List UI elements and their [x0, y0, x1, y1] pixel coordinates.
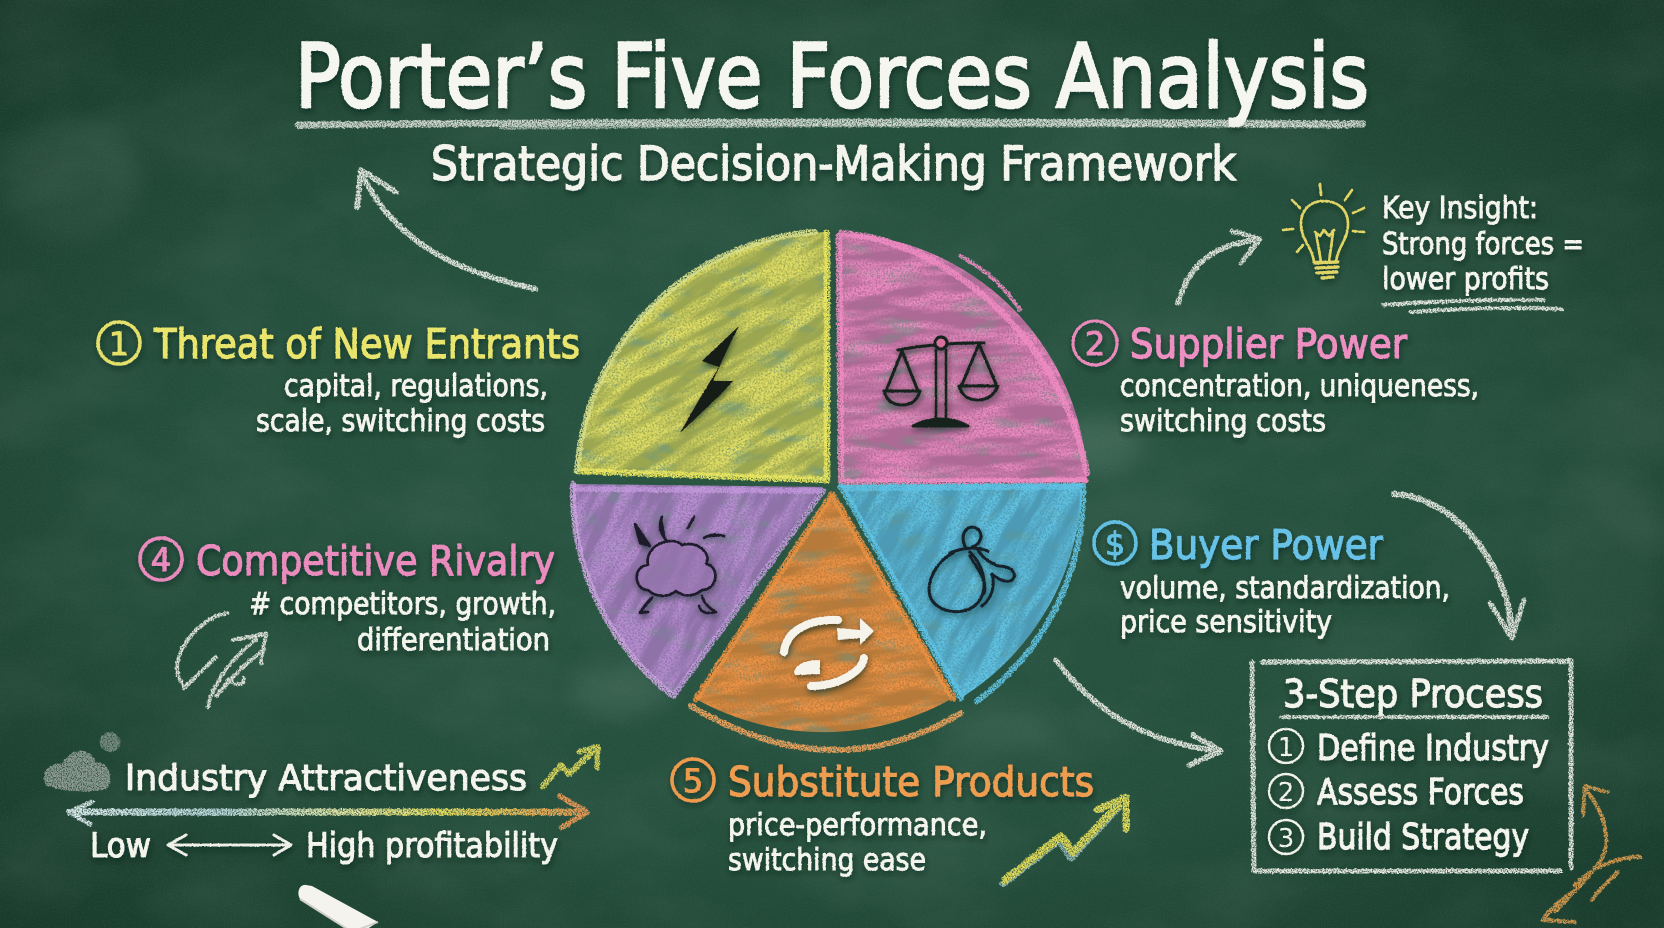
- number badge 1: [98, 322, 140, 364]
- callout: key insight: [1178, 184, 1584, 312]
- panel heading: 3-Step Process: [1283, 672, 1543, 716]
- box outline: [1252, 661, 1571, 871]
- arrow to bulb: [1178, 231, 1260, 303]
- arrow: curved up-left towards title: [357, 170, 536, 289]
- gradient arrow: [69, 796, 587, 828]
- heading: Threat of New Entrants: [153, 320, 580, 368]
- description: [1120, 571, 1450, 640]
- high profitability label: High profitability: [306, 826, 558, 866]
- label: substitute products: [672, 758, 1094, 878]
- icon: orange double arrow: [1543, 786, 1640, 922]
- arrow: pie to process box: [1056, 660, 1221, 765]
- description: [728, 808, 987, 878]
- subtitle: Strategic Decision-Making Framework: [431, 137, 1237, 192]
- number badge 5: 5: [683, 762, 703, 800]
- pie slice: competitive rivalry, purple: [569, 480, 826, 699]
- step 3: 3: [1278, 824, 1294, 854]
- icon: small yellow trend arrow: [543, 746, 598, 786]
- number badge 2: 2: [1085, 325, 1105, 363]
- description: capital, regulations,: [284, 369, 548, 404]
- panel: industry attractiveness scale: [44, 732, 598, 866]
- icon: cycle arrows: [784, 618, 874, 686]
- description: switching costs: [1120, 404, 1326, 439]
- icon: white rivalry arrows: [177, 613, 266, 708]
- label: threat of new entrants: [98, 320, 580, 439]
- panel: 3-step process: [1252, 661, 1571, 871]
- heading: Competitive Rivalry: [196, 537, 555, 585]
- description: [256, 369, 548, 439]
- icon: light bulb: [1283, 184, 1364, 278]
- scale heading: Industry Attractiveness: [125, 758, 527, 799]
- heading underline: [1281, 715, 1547, 719]
- chalk stick: [298, 885, 378, 928]
- pie slice: substitute products, orange: [688, 491, 964, 754]
- description: volume, standardization,: [1120, 571, 1450, 606]
- heading: Supplier Power: [1130, 320, 1407, 368]
- step 3: [1269, 817, 1529, 858]
- dollar badge: $: [1105, 525, 1125, 563]
- number badge 5: [672, 759, 714, 801]
- description: [1120, 369, 1479, 439]
- description: price-performance,: [728, 808, 987, 843]
- step 2: [1269, 772, 1524, 813]
- description: switching ease: [728, 843, 926, 878]
- double-headed arrow: [168, 835, 291, 855]
- number badge 4: 4: [151, 541, 171, 579]
- label: supplier power: [1073, 320, 1479, 439]
- insight text: Strong forces =: [1382, 227, 1584, 262]
- label: buyer power: [1094, 521, 1450, 640]
- description: concentration, uniqueness,: [1120, 369, 1479, 404]
- description: [249, 587, 556, 658]
- insight text: Key Insight:: [1382, 191, 1538, 226]
- title underline: [298, 122, 1363, 128]
- label: competitive rivalry: [140, 537, 556, 658]
- dollar badge: [1094, 522, 1136, 564]
- icon: conflict cloud: [635, 517, 724, 613]
- pie slice: threat of new entrants, yellow: [573, 228, 832, 484]
- step 1: Define Industry: [1317, 728, 1549, 769]
- heading: Substitute Products: [728, 758, 1094, 806]
- step 1: 1: [1278, 733, 1294, 763]
- title: Porter’s Five Forces Analysis: [295, 25, 1369, 128]
- icon: lightning bolt: [680, 326, 739, 433]
- pie slice: supplier power, pink: [834, 229, 1090, 485]
- number badge 1: 1: [109, 325, 129, 363]
- icon: money bags: [929, 527, 1014, 612]
- icon: grey cloud: [44, 732, 120, 791]
- icon: yellow growth arrow: [1003, 797, 1126, 884]
- pie slice: buyer power, blue: [837, 482, 1088, 704]
- description: scale, switching costs: [256, 404, 545, 439]
- pie chart: five forces: [290, 0, 1304, 919]
- icon: balance scale: [884, 337, 998, 426]
- arrow: buyer power to process box: [1394, 494, 1524, 638]
- low label: Low: [90, 826, 151, 866]
- description: # competitors, growth,: [249, 587, 556, 622]
- heading: Buyer Power: [1149, 521, 1383, 569]
- number badge 2: [1073, 321, 1117, 365]
- description: price sensitivity: [1120, 605, 1332, 640]
- insight underline: [1383, 300, 1562, 312]
- step 3: Build Strategy: [1317, 817, 1529, 858]
- insight text: [1382, 191, 1584, 297]
- insight text: lower profits: [1382, 262, 1549, 297]
- step 2: 2: [1278, 778, 1294, 808]
- number badge 4: [140, 538, 182, 580]
- description: differentiation: [357, 623, 550, 658]
- step 2: Assess Forces: [1317, 772, 1524, 813]
